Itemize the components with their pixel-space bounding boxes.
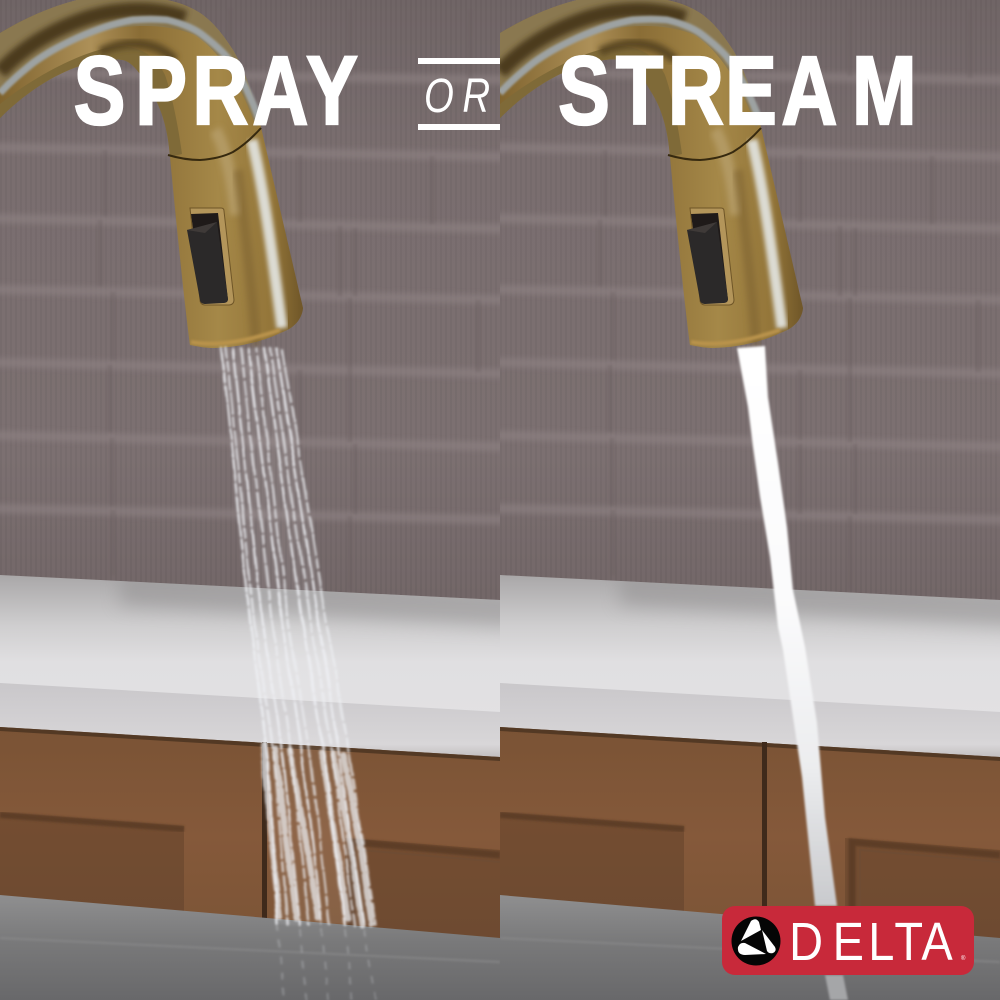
panel: spray background <box>0 0 500 1000</box>
faucet: spray side <box>0 0 303 348</box>
heading: OR with rules <box>418 58 500 130</box>
logo: Delta: DELTA <box>789 911 953 972</box>
logo: Delta <box>722 906 974 975</box>
logo: Delta: ® <box>961 955 966 962</box>
faucet: stream side <box>500 0 803 348</box>
heading: SPRAY: SPRAY <box>74 36 358 145</box>
icon: Delta triad mark <box>732 916 780 966</box>
heading: OR with rules: OR <box>424 70 490 123</box>
panel: stream background <box>480 0 1000 1000</box>
water: solid stream <box>737 346 848 1000</box>
heading: STREAM: STREAM <box>558 36 917 145</box>
water: spray streaks <box>221 348 376 1000</box>
